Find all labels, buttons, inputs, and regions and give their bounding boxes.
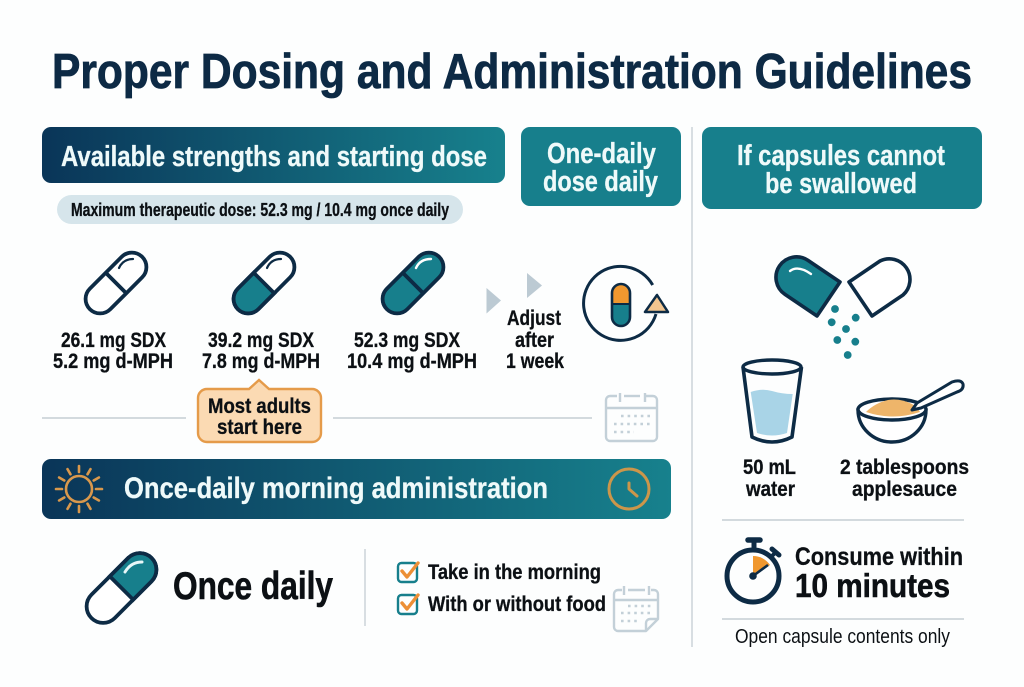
- icon: sun: [56, 466, 102, 512]
- text: once daily: Once daily: [173, 565, 333, 608]
- panel heading: one-daily dose: One-daily: [547, 138, 656, 170]
- panel heading: available strengths: [42, 127, 505, 183]
- label: 2 tablespoons applesauce: applesauce: [852, 477, 957, 501]
- text: adjust after 1 week: Adjust: [507, 306, 561, 330]
- checklist item: with or without food: With or without food: [428, 592, 606, 616]
- icon: calendar with folded corner: [614, 586, 658, 631]
- icon: half-filled capsule: [228, 247, 300, 319]
- label: 26.1 mg: 26.1 mg SDX: [61, 328, 167, 352]
- maximum dose pill: [57, 195, 463, 224]
- panel heading: one-daily dose: [521, 127, 681, 206]
- callout: most adults start here: [198, 380, 321, 442]
- icon: checkbox: [398, 595, 418, 614]
- panel heading: available strengths: Available strengths and starting dose: [61, 141, 487, 173]
- icon: once-daily capsule: [80, 546, 163, 630]
- label: 52.3 mg: 52.3 mg SDX: [354, 328, 461, 352]
- text: consume within 10 minutes: 10 minutes: [795, 567, 950, 604]
- icon: outline capsule: [80, 247, 152, 319]
- label: 26.1 mg: [53, 328, 173, 373]
- label: 39.2 mg: [202, 328, 320, 373]
- panel heading: capsules cannot be swallowed: [702, 127, 982, 209]
- label: 52.3 mg: [347, 328, 477, 373]
- label: 50 mL water: water: [745, 477, 796, 501]
- icon: stopwatch: [727, 540, 779, 602]
- panel heading: capsules cannot be swallowed: be swallowed: [765, 168, 917, 200]
- icon: glass of water: [743, 360, 802, 442]
- icon: clock: [609, 469, 649, 509]
- label: 39.2 mg: 7.8 mg d-MPH: [202, 349, 320, 373]
- panel heading: once-daily morning administration: Once-daily morning administration: [124, 472, 548, 505]
- label: 50 mL water: [743, 455, 796, 501]
- panel heading: once-daily morning administration: [42, 459, 671, 519]
- checklist item: take in the morning: Take in the morning: [428, 560, 601, 584]
- strength 1: capsule and label: [53, 247, 173, 373]
- icon: opened capsule with falling granules: [776, 257, 910, 359]
- text: adjust after 1 week: 1 week: [506, 349, 564, 373]
- footnote: open capsule contents only: Open capsule contents only: [735, 626, 950, 648]
- label: 39.2 mg: 39.2 mg SDX: [208, 328, 315, 352]
- panel heading: capsules cannot be swallowed: If capsules cannot: [737, 140, 945, 172]
- strength 2: capsule and label: [202, 247, 320, 373]
- text: consume within 10 minutes: Consume within: [795, 543, 963, 571]
- arrow: step one: [486, 288, 501, 314]
- label: 2 tablespoons applesauce: 2 tablespoons: [840, 455, 969, 479]
- icon: bowl of applesauce with spoon: [858, 381, 963, 442]
- icon: checkbox: [398, 563, 418, 582]
- callout: most adults start here: Most adults: [208, 394, 311, 418]
- text: adjust after 1 week: after: [515, 328, 555, 352]
- text: consume within 10 minutes: [795, 543, 963, 604]
- label: 2 tablespoons applesauce: [840, 455, 969, 501]
- arrow: step two: [527, 273, 542, 298]
- text: adjust after 1 week: [506, 306, 564, 373]
- icon: filled capsule: [377, 247, 449, 319]
- callout: most adults start here: start here: [217, 415, 302, 439]
- label: 26.1 mg: 5.2 mg d-MPH: [53, 349, 173, 373]
- icon: calendar: [606, 393, 657, 441]
- icon: titration cycle: [584, 266, 668, 340]
- label: 50 mL water: 50 mL: [743, 455, 796, 479]
- strength 3: capsule and label: [347, 247, 477, 373]
- maximum dose pill: Maximum therapeutic dose: 52.3 mg / 10.4 mg once daily: [71, 200, 449, 220]
- panel heading: one-daily dose: dose daily: [543, 166, 658, 198]
- label: 52.3 mg: 10.4 mg d-MPH: [347, 349, 477, 373]
